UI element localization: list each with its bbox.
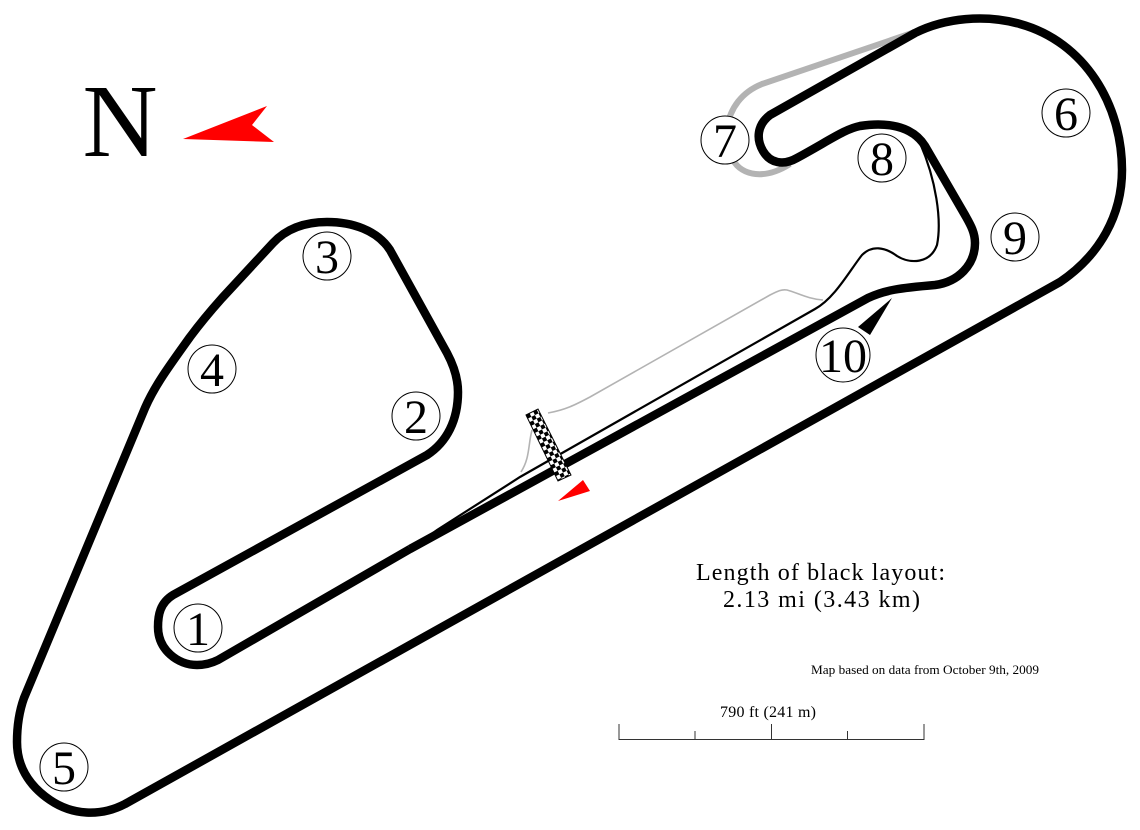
- corner 8: 8: [870, 133, 894, 186]
- corner 4: 4: [200, 344, 224, 397]
- pit lane: [415, 143, 939, 546]
- corner 10: 10: [819, 330, 867, 383]
- corner 5: 5: [52, 742, 76, 795]
- corner 1: 1: [186, 603, 210, 656]
- corner 8: [858, 133, 906, 186]
- north label: N: [82, 64, 158, 179]
- corner 2: [392, 391, 440, 444]
- corner 5: [40, 742, 88, 795]
- corner 1: [174, 603, 222, 656]
- corner 6: [1042, 88, 1090, 141]
- corner 9: [991, 212, 1039, 265]
- icon: north arrow: [183, 106, 274, 142]
- scale bar: [619, 704, 924, 740]
- track length text: Length of black layout:: [696, 560, 945, 586]
- track length text: [696, 560, 945, 613]
- corner 6: 6: [1054, 88, 1078, 141]
- corner 4: [188, 344, 236, 397]
- scale bar: 790 ft (241 m): [720, 704, 816, 721]
- start/finish line: [526, 409, 571, 481]
- icon: direction arrow: [558, 480, 590, 501]
- data source note: Map based on data from October 9th, 2009: [811, 663, 1039, 677]
- corner 2: 2: [404, 391, 428, 444]
- corner 3: [303, 231, 351, 284]
- icon: corner 10 pointer: [858, 298, 892, 335]
- corner 7: [701, 115, 749, 168]
- corner 3: 3: [315, 231, 339, 284]
- track length text: 2.13 mi (3.43 km): [723, 587, 920, 613]
- alternate grey layout: [521, 32, 915, 472]
- corner 9: 9: [1003, 212, 1027, 265]
- corner 7: 7: [713, 115, 737, 168]
